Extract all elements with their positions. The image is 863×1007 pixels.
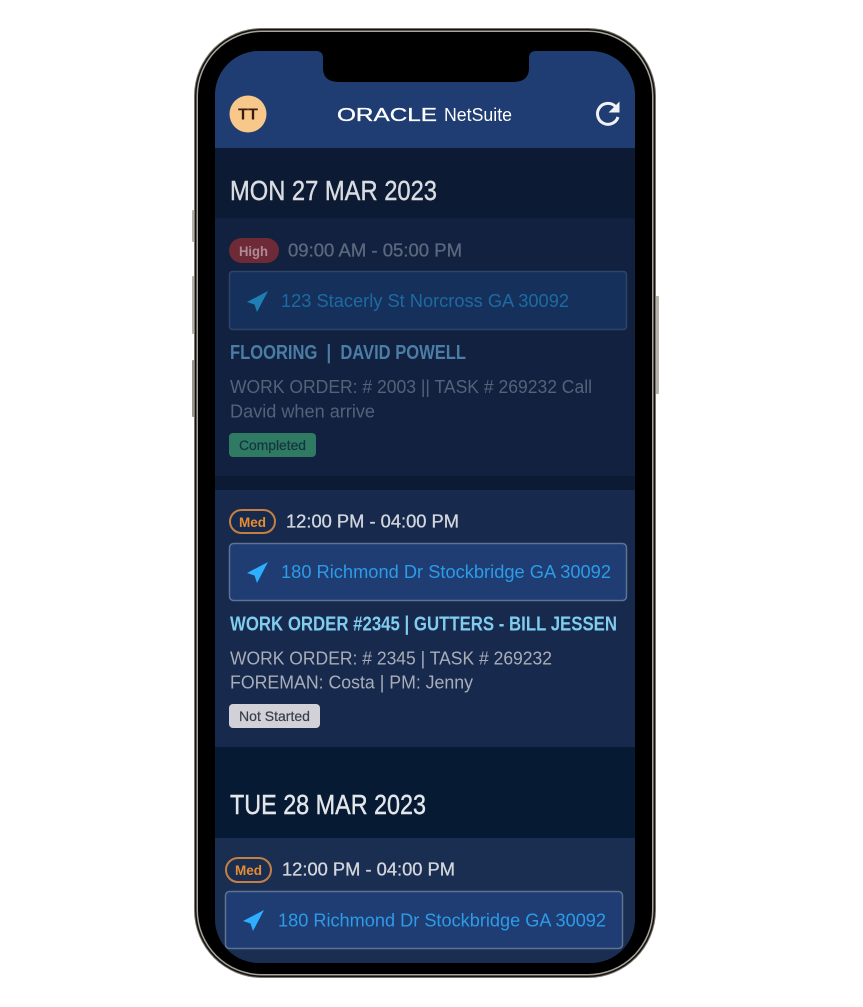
priority pill: High xyxy=(229,238,279,263)
priority pill: Med xyxy=(230,510,275,533)
phone notch xyxy=(316,51,536,82)
card: completed job xyxy=(215,218,635,476)
priority pill: Med xyxy=(226,858,271,882)
status: Not Started: Not Started xyxy=(239,708,310,724)
date band: Tuesday: TUE 28 MAR 2023 xyxy=(230,789,426,820)
card: not started job xyxy=(215,490,635,747)
address box xyxy=(226,892,622,948)
priority pill: Med: Med xyxy=(235,862,262,878)
address box xyxy=(230,272,626,330)
job details: FOREMAN: Costa | PM: Jenny xyxy=(230,672,473,692)
app header bar xyxy=(215,51,635,148)
status: Completed: Completed xyxy=(239,437,306,453)
phone frame xyxy=(192,28,659,978)
time: 09:00 AM - 05:00 PM xyxy=(288,240,462,260)
job title: FLOORING | DAVID POWELL xyxy=(230,342,466,364)
icon: navigation arrow xyxy=(247,291,268,312)
job details: WORK ORDER: # 2003 || TASK # 269232 Call xyxy=(230,377,592,397)
job details: WORK ORDER: # 2345 | TASK # 269232 xyxy=(230,648,552,668)
time: 12:00 PM - 04:00 PM xyxy=(286,512,459,532)
job details: David when arrive xyxy=(230,402,375,422)
status: Not Started xyxy=(229,704,320,728)
date band: Monday xyxy=(232,180,436,200)
icon: refresh xyxy=(597,102,620,124)
avatar: TT xyxy=(238,106,259,124)
phone screen xyxy=(215,51,635,963)
logo: Oracle NetSuite: NetSuite xyxy=(444,105,512,125)
address box: 123 Stacerly St Norcross GA 30092 xyxy=(281,291,569,311)
icon: navigation arrow xyxy=(243,910,264,931)
date band: Monday: MON 27 MAR 2023 xyxy=(230,175,437,206)
status: Completed xyxy=(229,433,316,457)
priority pill: Med: Med xyxy=(239,514,266,530)
logo: Oracle NetSuite xyxy=(338,108,512,122)
priority pill: High: High xyxy=(239,243,268,259)
icon: navigation arrow xyxy=(247,562,268,583)
address box: 180 Richmond Dr Stockbridge GA 30092 xyxy=(278,910,606,930)
job details xyxy=(230,380,591,418)
logo: Oracle NetSuite: ORACLE xyxy=(337,105,437,125)
job details xyxy=(230,648,552,692)
infographic: phone mockup xyxy=(192,28,659,978)
avatar xyxy=(230,96,266,132)
time: 12:00 PM - 04:00 PM xyxy=(282,860,455,880)
address box: 180 Richmond Dr Stockbridge GA 30092 xyxy=(281,562,611,582)
address box xyxy=(230,544,626,600)
job title: WORK ORDER #2345 | GUTTERS - BILL JESSEN xyxy=(230,614,617,636)
card: next day job xyxy=(215,838,635,963)
date band: Tuesday xyxy=(230,794,426,814)
